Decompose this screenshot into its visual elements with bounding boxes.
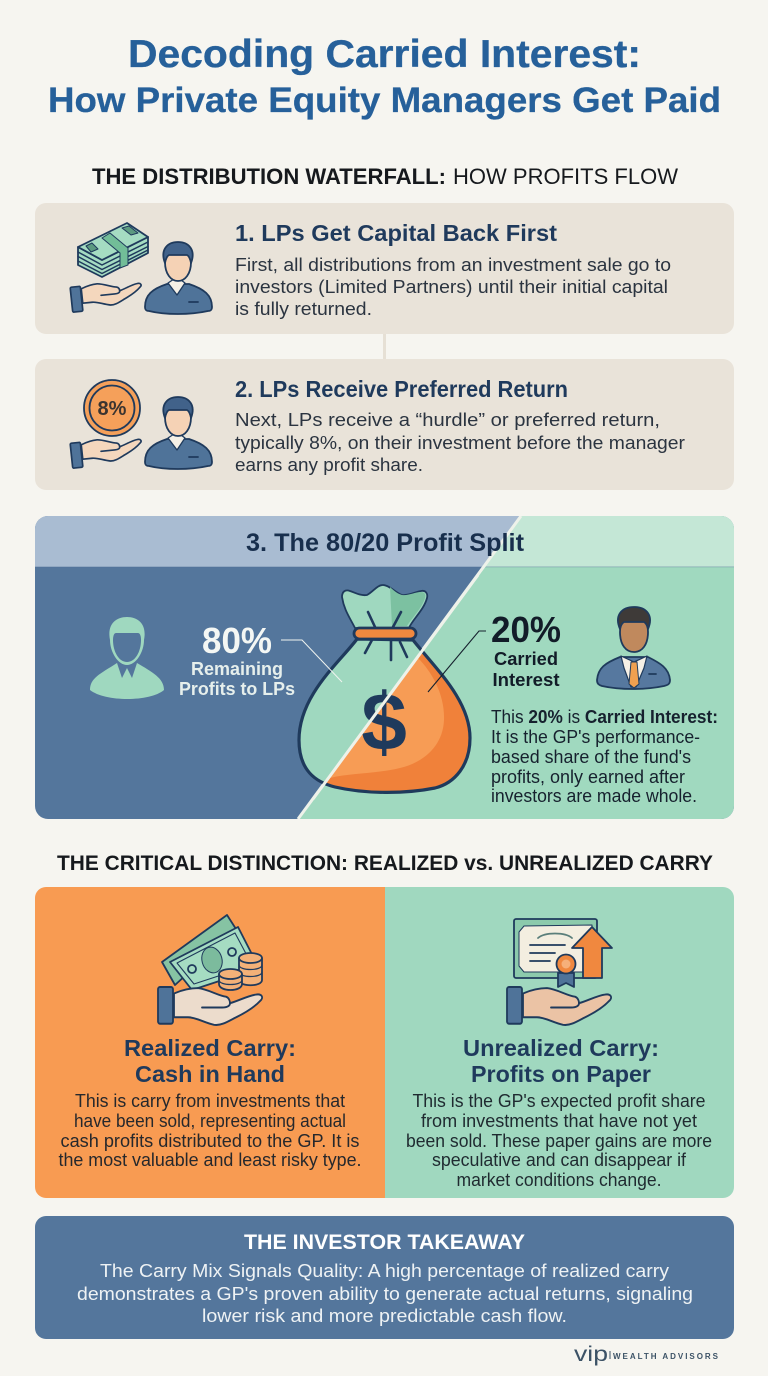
icon: money bag: $: [361, 677, 407, 768]
text: carried interest explanation: [491, 707, 718, 806]
text: takeaway: lower risk and more predictable cash flow.: [202, 1306, 567, 1326]
text: realized carry: have been sold, representing actual: [74, 1111, 346, 1131]
heading: realized carry: [124, 1035, 296, 1087]
text: step 1: [235, 255, 671, 319]
heading: realized carry: Cash in Hand: [135, 1061, 285, 1087]
heading: realized carry: Realized Carry:: [124, 1035, 296, 1061]
text: carried interest explanation: investors are made whole.: [491, 786, 697, 806]
icon: investor person: [145, 397, 212, 469]
heading: critical distinction: THE CRITICAL DISTINCTION: REALIZED vs. UNREALIZED CARRY: [57, 852, 713, 875]
text: realized carry: cash profits distributed to the GP. It is: [60, 1131, 360, 1151]
icon: hand: [70, 279, 143, 312]
logo: vip wealth advisors: WEALTH ADVISORS: [613, 1352, 719, 1361]
heading: unrealized carry: Unrealized Carry:: [463, 1035, 659, 1061]
callout: 20%: [491, 609, 561, 690]
text: carried interest explanation: profits, only earned after: [491, 767, 685, 787]
text: unrealized carry: been sold. These paper gains are more: [406, 1131, 712, 1151]
text: step 2: earns any profit share.: [235, 455, 423, 475]
panel: step 2: [35, 359, 734, 490]
heading: investor takeaway: THE INVESTOR TAKEAWAY: [244, 1231, 525, 1254]
text: carried interest explanation: based share of the fund's: [491, 747, 691, 767]
arrow: 20% leader: [428, 631, 486, 692]
text: realized carry: [58, 1091, 362, 1170]
text: unrealized carry: This is the GP's expected profit share: [412, 1091, 706, 1111]
logo: vip wealth advisors: vip: [574, 1343, 608, 1366]
logo: vip wealth advisors: [574, 1343, 719, 1366]
text: carried interest explanation: It is the GP's performance-: [491, 727, 700, 747]
title: [48, 33, 721, 120]
icon: money bag: [297, 576, 480, 800]
callout: 80%: [179, 620, 295, 699]
icon: 8% coin: [84, 380, 140, 436]
callout: 80%: Profits to LPs: [179, 679, 295, 699]
heading: distribution waterfall: HOW PROFITS FLOW: [453, 164, 678, 189]
callout: 20%: Carried: [494, 649, 558, 669]
text: unrealized carry: from investments that have not yet: [421, 1111, 697, 1131]
text: unrealized carry: [406, 1091, 712, 1190]
icon: hand: [70, 435, 143, 468]
text: step 2: typically 8%, on their investment before the manager: [235, 433, 685, 453]
icon: GP manager: [597, 607, 670, 689]
title: How Private Equity Managers Get Paid: [48, 80, 721, 120]
callout: 20%: Interest: [492, 670, 560, 690]
text: takeaway: demonstrates a GP's proven ability to generate actual returns, signaling: [77, 1284, 693, 1304]
text: carried interest explanation: This 20% is Carried Interest:: [491, 707, 718, 727]
icon: certificate in hand: [507, 919, 612, 1025]
callout: 80%: 80%: [202, 620, 272, 661]
arrow: 80% leader: [281, 640, 342, 682]
text: step 1: is fully returned.: [235, 299, 372, 319]
text: step 1: investors (Limited Partners) until their initial capital: [235, 277, 668, 297]
text: step 2: Next, LPs receive a “hurdle” or preferred return,: [235, 410, 660, 430]
heading: distribution waterfall: [92, 164, 678, 189]
heading: step 2: 2. LPs Receive Preferred Return: [235, 376, 568, 402]
heading: step 1: 1. LPs Get Capital Back First: [235, 220, 557, 246]
icon: LP silhouette: [90, 617, 164, 699]
panel: step 1: [35, 203, 734, 334]
icon: cash and coins in hand: [158, 915, 262, 1025]
text: unrealized carry: market conditions change.: [456, 1170, 662, 1190]
title: Decoding Carried Interest:: [128, 33, 641, 76]
text: unrealized carry: speculative and can disappear if: [432, 1150, 687, 1170]
text: takeaway: The Carry Mix Signals Quality: A high percentage of realized carry: [100, 1261, 669, 1281]
heading: distribution waterfall: THE DISTRIBUTION WATERFALL:: [92, 164, 446, 189]
text: step 2: [235, 410, 685, 475]
icon: cash stack: [78, 223, 148, 277]
callout: 80%: Remaining: [191, 659, 283, 679]
heading: step 3: 3. The 80/20 Profit Split: [246, 529, 525, 557]
icon: investor person: [145, 242, 212, 314]
text: step 1: First, all distributions from an investment sale go to: [235, 255, 671, 275]
icon: 8% coin: 8%: [98, 398, 127, 420]
panel: realized vs unrealized: [35, 887, 734, 1198]
callout: 20%: 20%: [491, 609, 561, 650]
panel: investor takeaway: [35, 1216, 734, 1339]
panel: 80/20 profit split: [35, 516, 760, 819]
text: realized carry: This is carry from investments that: [75, 1091, 345, 1111]
text: takeaway: [77, 1261, 693, 1326]
text: realized carry: the most valuable and least risky type.: [58, 1150, 362, 1170]
heading: unrealized carry: Profits on Paper: [471, 1061, 651, 1087]
heading: unrealized carry: [463, 1035, 659, 1087]
